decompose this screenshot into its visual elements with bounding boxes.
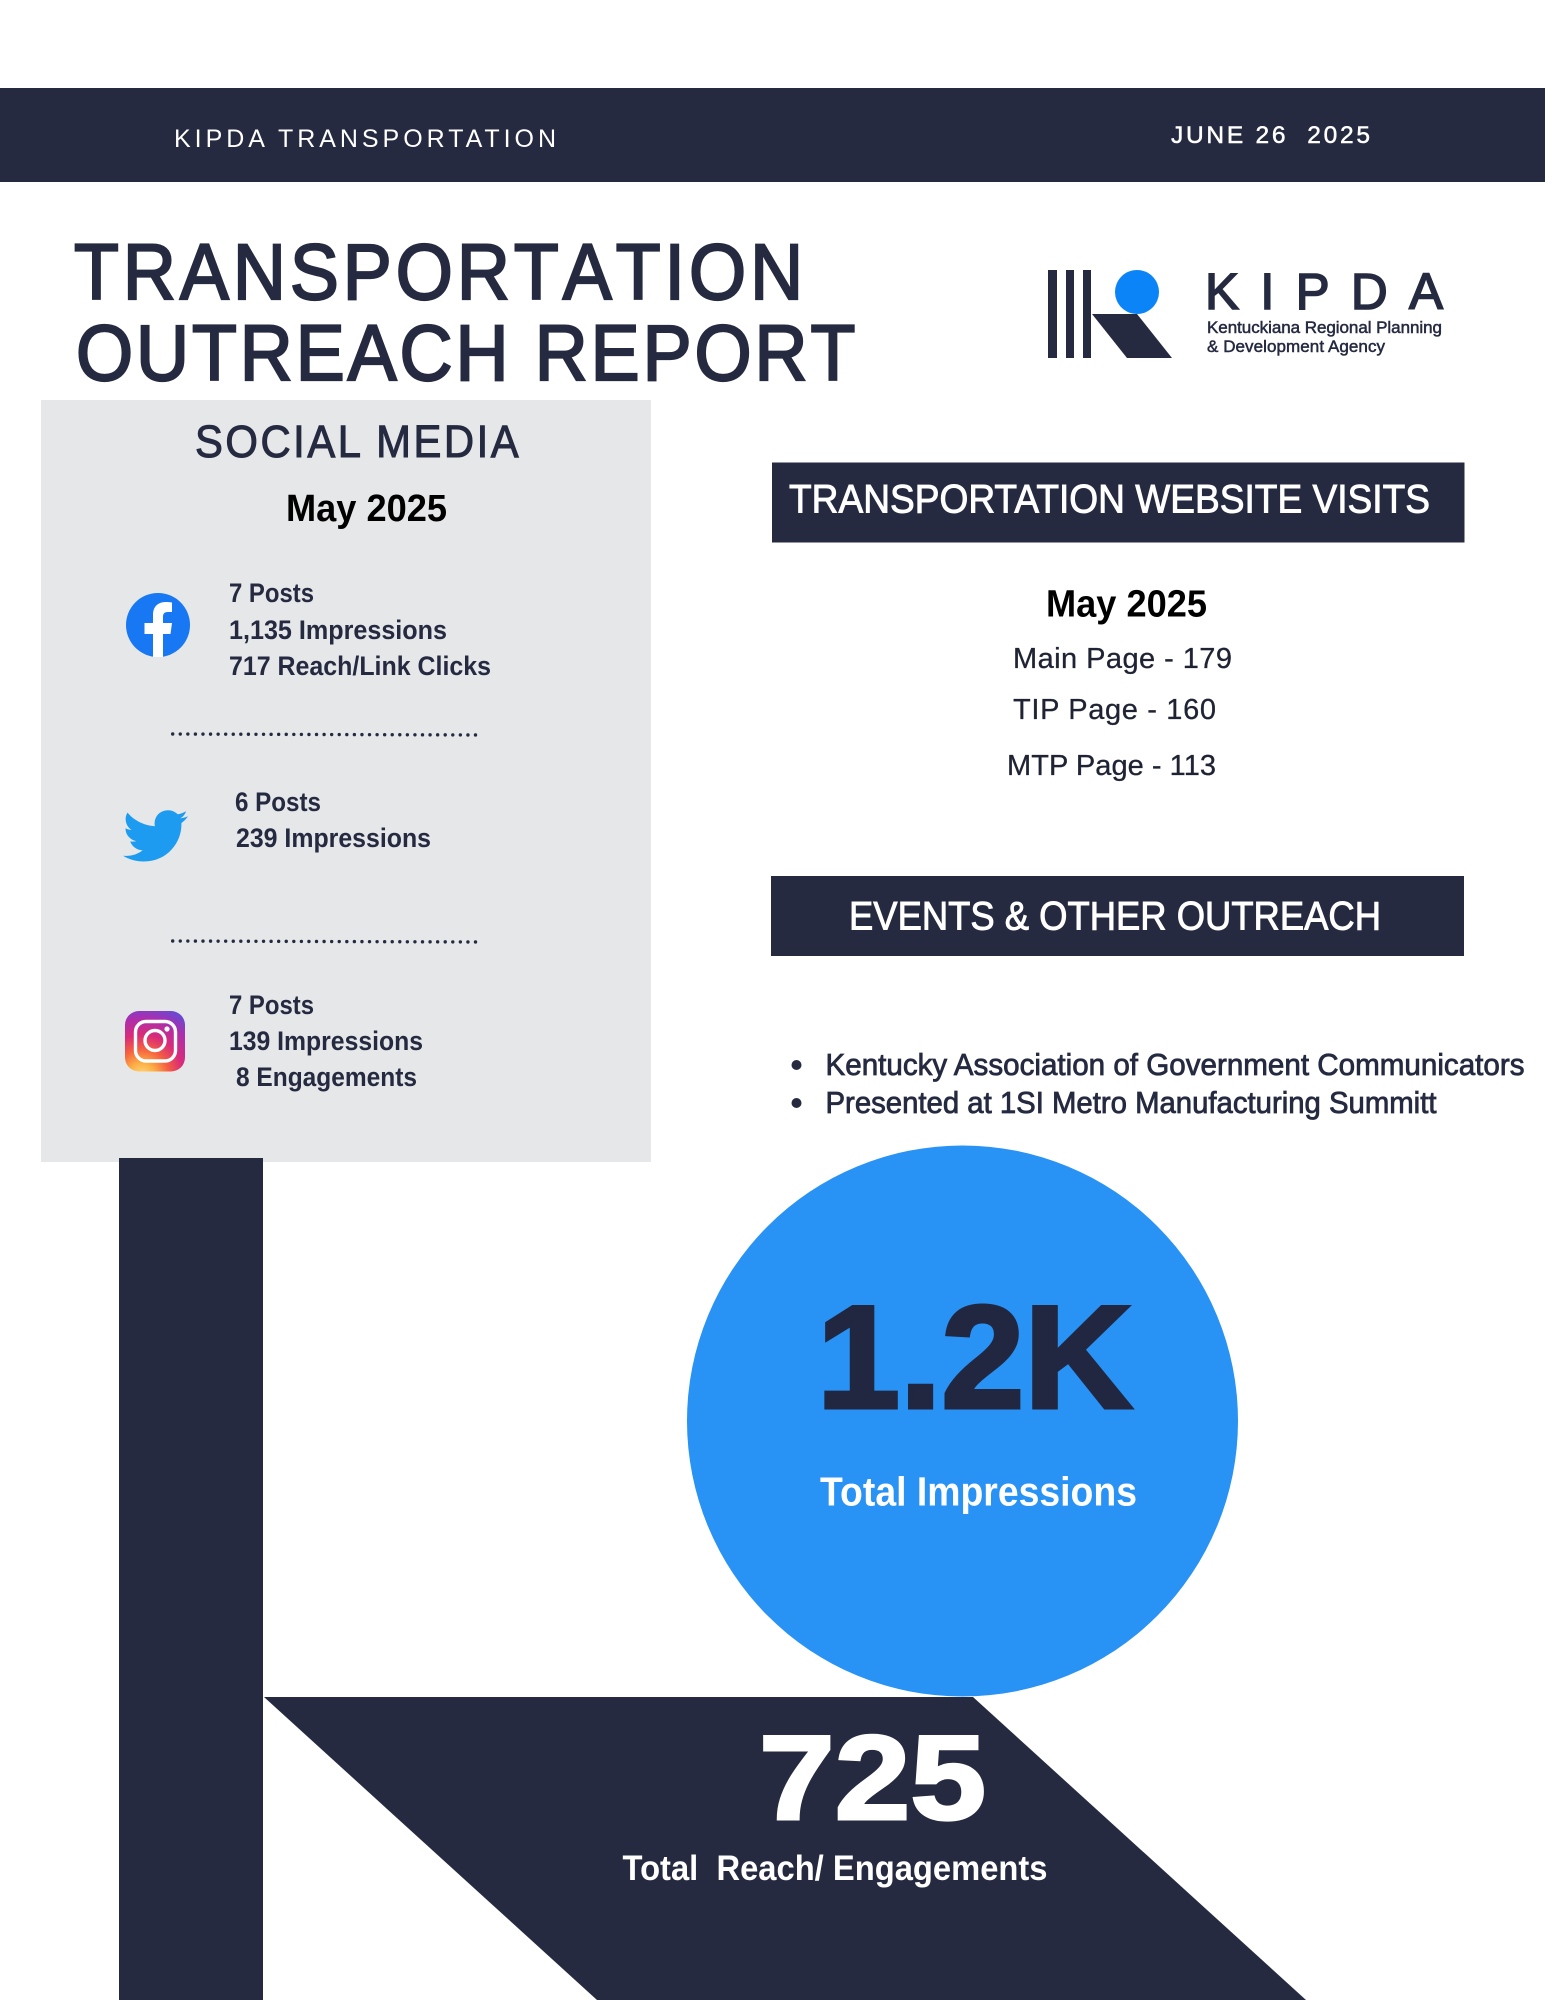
logo tagline: Kentuckiana Regional Planning — [1207, 318, 1442, 337]
facebook stats — [229, 578, 491, 681]
icon: twitter — [123, 810, 188, 862]
twitter stats: 6 Posts — [235, 787, 321, 817]
website visits list — [1007, 584, 1232, 782]
events heading: EVENTS & OTHER OUTREACH — [849, 894, 1381, 938]
K shape: vertical bar — [119, 1158, 263, 2000]
twitter stats: 239 Impressions — [236, 823, 431, 853]
facebook stats: 1,135 Impressions — [229, 615, 447, 645]
header date: JUNE 26 2025 — [1171, 122, 1370, 149]
events list: Kentucky Association of Government Communicators — [826, 1047, 1524, 1082]
social media month: May 2025 — [286, 488, 447, 530]
impressions number: 1.2K — [817, 1276, 1132, 1438]
logo tagline: & Development Agency — [1207, 337, 1386, 356]
logo mark — [1048, 270, 1172, 358]
website visits list: Main Page - 179 — [1013, 643, 1232, 675]
website visits list: MTP Page - 113 — [1007, 750, 1216, 782]
social media heading: SOCIAL MEDIA — [195, 418, 519, 467]
total impressions circle — [687, 1146, 1238, 1696]
K shape: diagonal leg — [264, 1697, 1306, 2000]
events list: Presented at 1SI Metro Manufacturing Summitt — [826, 1085, 1437, 1120]
instagram stats: 8 Engagements — [236, 1062, 417, 1092]
impressions label: Total Impressions — [820, 1468, 1137, 1514]
instagram stats — [229, 990, 423, 1092]
website visits list: May 2025 — [1046, 584, 1207, 626]
logo wordmark: KIPDA — [1205, 263, 1443, 320]
instagram stats: 7 Posts — [229, 990, 314, 1020]
header left label: KIPDA TRANSPORTATION — [174, 125, 556, 153]
icon: facebook — [126, 593, 190, 657]
twitter stats — [235, 787, 431, 853]
website visits heading — [772, 462, 1464, 542]
title: TRANSPORTATION — [74, 229, 803, 317]
facebook stats: 717 Reach/Link Clicks — [229, 651, 491, 681]
title: OUTREACH REPORT — [76, 310, 855, 398]
website visits heading: TRANSPORTATION WEBSITE VISITS — [789, 478, 1430, 522]
instagram stats: 139 Impressions — [229, 1026, 423, 1056]
total reach label: Total Reach/ Engagements — [622, 1849, 1048, 1888]
header band — [0, 88, 1545, 182]
icon: instagram — [125, 1011, 185, 1072]
total reach number: 725 — [759, 1711, 986, 1845]
events list — [792, 1047, 1524, 1120]
facebook stats: 7 Posts — [229, 578, 314, 608]
logo tagline — [1207, 318, 1442, 356]
events heading — [771, 876, 1464, 956]
website visits list: TIP Page - 160 — [1013, 694, 1216, 726]
title — [74, 229, 855, 398]
KIPDA logo — [1048, 263, 1443, 358]
panel: social media — [41, 400, 651, 1162]
